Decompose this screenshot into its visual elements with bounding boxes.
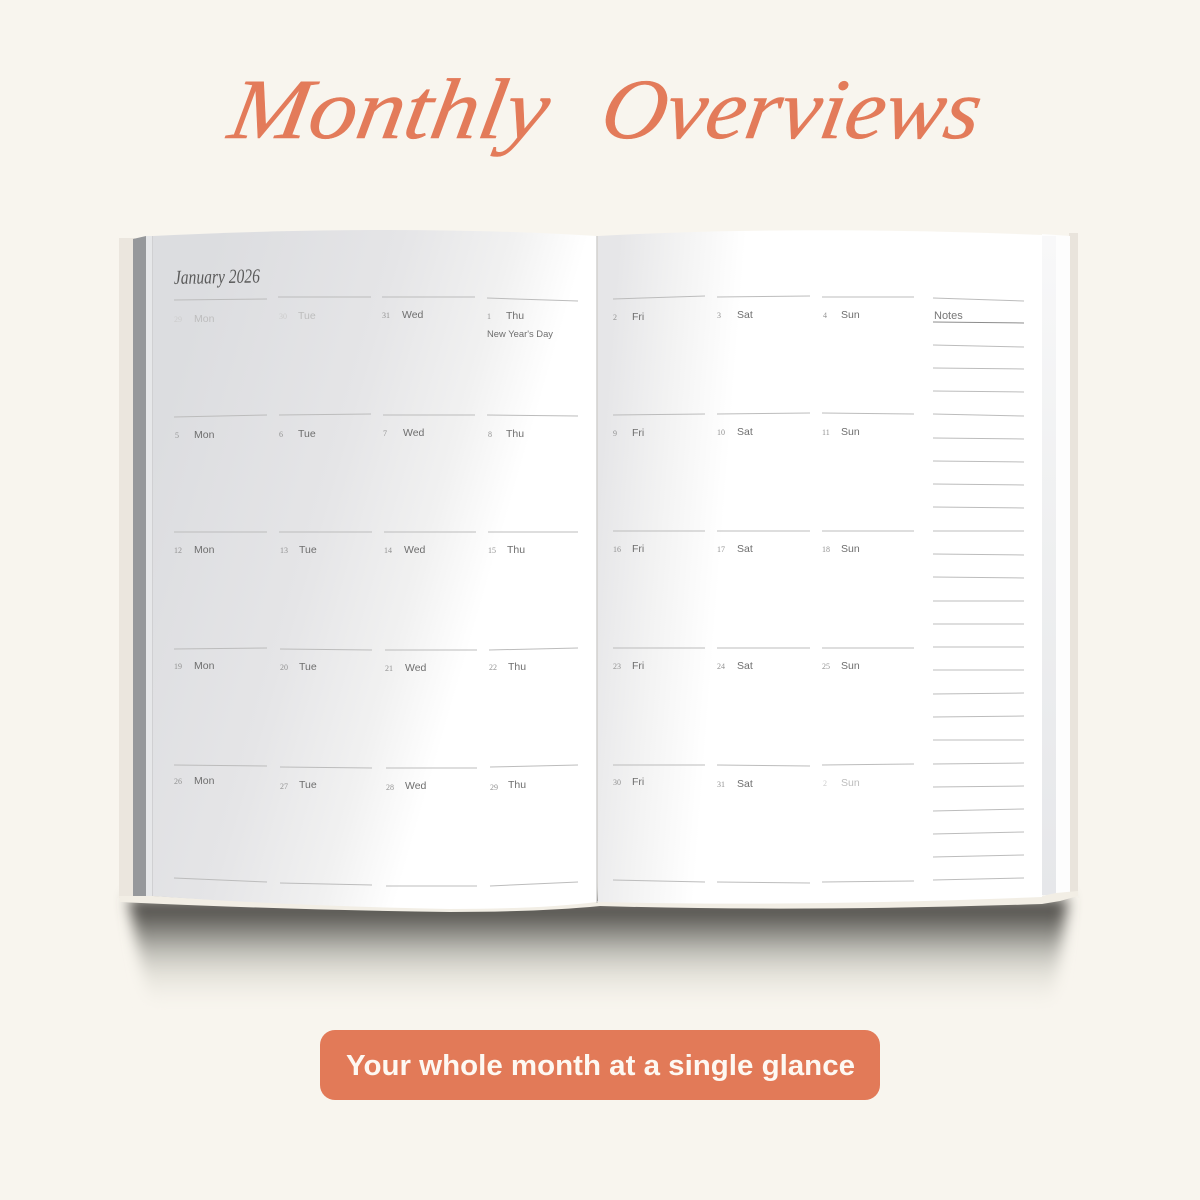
day: Sun 11: Sun: [841, 426, 860, 438]
day: Mon 12: [174, 532, 267, 556]
day: Tue 13: Tue: [299, 544, 317, 556]
callout text: Your whole month at a single glance: [346, 1050, 855, 1082]
day: Sat 31: [717, 765, 810, 790]
right page: [598, 230, 1042, 904]
day: Mon 29: [174, 299, 267, 325]
bottom rules left: [174, 878, 578, 886]
day: Wed 21: [385, 650, 477, 674]
day: Sun 18: [822, 531, 914, 555]
day: Sun 4: Sun: [841, 309, 860, 321]
day: Thu 8: Thu: [506, 428, 524, 440]
title: Overviews: [595, 62, 989, 157]
day: Wed 21: 21: [385, 664, 393, 673]
day: Tue 6: Tue: [298, 428, 316, 440]
day: Sat 3: Sat: [737, 309, 753, 321]
day: Sat 17: Sat: [737, 543, 753, 555]
day: Tue 13: [279, 532, 372, 556]
day: Fri 23: [613, 648, 705, 672]
day: Thu 1 New Year's Day: 1: [487, 312, 491, 321]
day: Mon 29: Mon: [194, 313, 215, 325]
day: Fri 2: [613, 296, 705, 323]
day: Thu 8: 8: [488, 430, 492, 439]
day: Sat 31: Sat: [737, 778, 753, 790]
day: Wed 14: [384, 532, 476, 556]
day: Tue 27: Tue: [299, 779, 317, 791]
day: Fri 16: Fri: [632, 543, 644, 555]
day: Fri 9: [613, 414, 705, 439]
day: Wed 31: Wed: [402, 309, 424, 321]
day: Thu 29: [490, 765, 578, 792]
day: Wed 28: 28: [386, 783, 394, 792]
day: Tue 20: [280, 649, 372, 673]
day: Thu 29: 29: [490, 783, 498, 792]
day: Mon 5: [174, 415, 267, 441]
notes column: [933, 298, 1024, 880]
day: Fri 2: 2: [613, 313, 617, 322]
day: Thu 15: [488, 532, 578, 556]
day: Wed 7: Wed: [403, 427, 425, 439]
day: Tue 20: Tue: [299, 661, 317, 673]
callout button: [320, 1030, 880, 1100]
day: Wed 31: 31: [382, 311, 390, 320]
day: Wed 14: 14: [384, 546, 392, 555]
day: Sun 4: 4: [823, 311, 827, 320]
day: Wed 7: 7: [383, 429, 387, 438]
day: Mon 5: 5: [175, 431, 179, 440]
day: Sat 10: 10: [717, 428, 725, 437]
title: [220, 62, 989, 157]
day: Sat 17: [717, 531, 810, 555]
back cover left edge: [119, 238, 135, 898]
day: Sun 2 faded: 2: [823, 779, 827, 788]
gutter: [596, 236, 598, 903]
day: Wed 14: Wed: [404, 544, 426, 556]
day: Tue 6: [279, 414, 371, 440]
bottom rules right: [613, 880, 914, 883]
day: Wed 21: Wed: [405, 662, 427, 674]
day: Sat 31: 31: [717, 780, 725, 789]
day: Thu 29: Thu: [508, 779, 526, 791]
page stack right: [1042, 234, 1070, 896]
left page calendar: [174, 297, 578, 886]
day: Tue 30: 30: [279, 312, 287, 321]
day: Fri 23: Fri: [632, 660, 644, 672]
day: Thu 22: Thu: [508, 661, 526, 673]
day: Thu 1 New Year's Day: [487, 298, 578, 340]
day: Fri 9: Fri: [632, 427, 644, 439]
day: Sat 3: [717, 296, 810, 321]
day: Fri 2: Fri: [632, 311, 644, 323]
day: Thu 8: [487, 415, 578, 440]
day: Fri 30: 30: [613, 778, 621, 787]
day: Tue 20: 20: [280, 663, 288, 672]
day: Thu 22: 22: [489, 663, 497, 672]
title: Monthly: [220, 62, 558, 157]
day: Sat 3: 3: [717, 311, 721, 320]
day: Mon 19: 19: [174, 662, 182, 671]
day: Tue 6: 6: [279, 430, 283, 439]
day: Sun 11: 11: [822, 428, 830, 437]
day: Thu 15: Thu: [507, 544, 525, 556]
day: Mon 26: 26: [174, 777, 182, 786]
day: Sat 10: [717, 413, 810, 438]
day: Thu 1 New Year's Day: Thu: [506, 310, 524, 322]
day: Wed 31: [382, 297, 475, 321]
day: Fri 30: Fri: [632, 776, 644, 788]
day: Tue 13: 13: [280, 546, 288, 555]
day: Mon 19: Mon: [194, 660, 215, 672]
day: Sat 10: Sat: [737, 426, 753, 438]
month heading: January 2026: [174, 266, 260, 289]
day: Sun 18: 18: [822, 545, 830, 554]
day: Mon 5: Mon: [194, 429, 215, 441]
day: Sun 2 faded: Sun: [841, 777, 860, 789]
day: Mon 12: Mon: [194, 544, 215, 556]
day: Fri 9: 9: [613, 429, 617, 438]
page stack left: [133, 236, 146, 896]
day: Sat 24: Sat: [737, 660, 753, 672]
day: Sat 24: 24: [717, 662, 725, 671]
day: Tue 27: 27: [280, 782, 288, 791]
day: Mon 26: [174, 765, 267, 787]
day: Fri 16: [613, 531, 705, 555]
day: Sun 25: 25: [822, 662, 830, 671]
day: Sat 17: 17: [717, 545, 725, 554]
bottom cover edge: [119, 891, 1078, 912]
back cover right edge: [1069, 233, 1078, 895]
day: Tue 30: Tue: [298, 310, 316, 322]
day: Wed 28: Wed: [405, 780, 427, 792]
day: Mon 26: Mon: [194, 775, 215, 787]
day: Sun 18: Sun: [841, 543, 860, 555]
day: Sun 11: [822, 413, 914, 438]
day: Sun 25: Sun: [841, 660, 860, 672]
right page calendar: [613, 296, 914, 883]
day: Fri 23: 23: [613, 662, 621, 671]
day: Tue 30: [278, 297, 371, 322]
day: Thu 22: [489, 648, 578, 673]
notes label: Notes: [934, 310, 963, 322]
open planner book: [119, 230, 1078, 912]
day: Fri 30: [613, 765, 705, 788]
book shadow: [128, 898, 1068, 1008]
day: Mon 19: [174, 648, 267, 672]
day: Tue 27: [280, 767, 372, 791]
day: Sun 4: [822, 297, 914, 321]
day: Wed 28: [386, 768, 477, 792]
day: Mon 12: 12: [174, 546, 182, 555]
day: Wed 7: [383, 415, 475, 439]
day: Thu 15: 15: [488, 546, 496, 555]
day: Sun 2 faded: [822, 764, 914, 789]
day: Mon 29: 29: [174, 315, 182, 324]
left page: [153, 230, 597, 909]
day: Sun 25: [822, 648, 914, 672]
day: Sat 24: [717, 648, 810, 672]
day: Thu 1 New Year's Day: New Year's Day: [487, 329, 553, 340]
day: Fri 16: 16: [613, 545, 621, 554]
